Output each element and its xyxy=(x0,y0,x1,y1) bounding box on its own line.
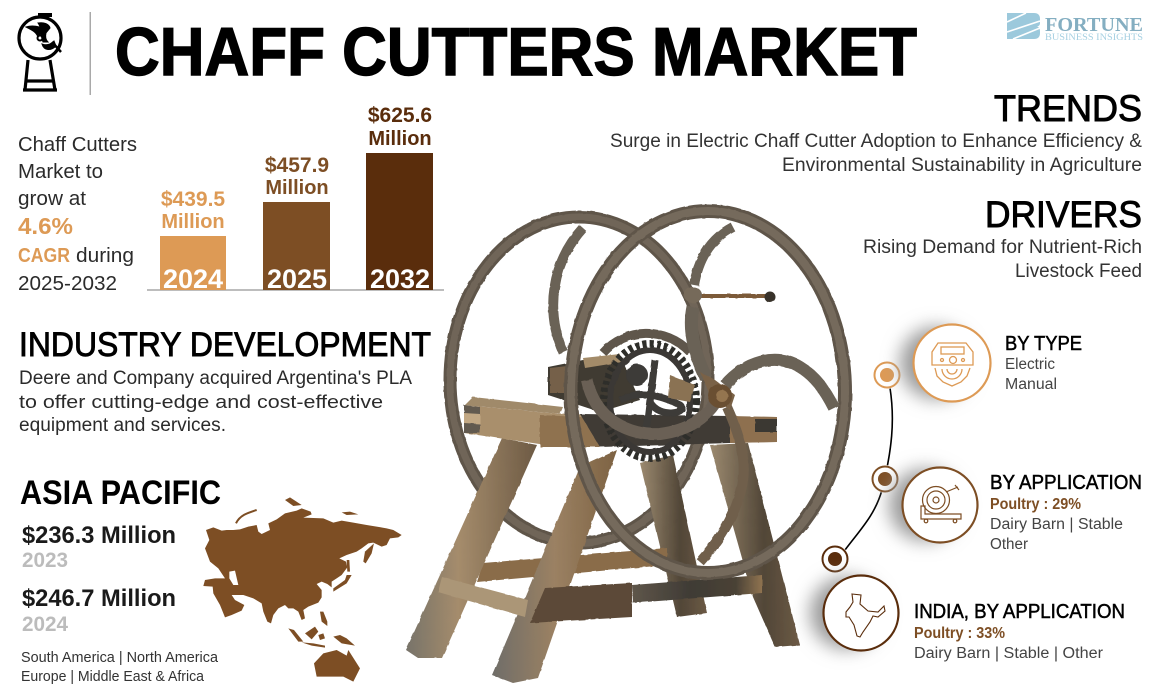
text block: industry development xyxy=(19,368,412,436)
text block: CAGR statement: Market to xyxy=(18,161,103,183)
text block: drivers xyxy=(863,237,1142,282)
icon: by type xyxy=(900,324,990,402)
connector line xyxy=(845,388,892,550)
text block: CAGR statement xyxy=(18,134,137,295)
heading: drivers: DRIVERS xyxy=(985,194,1142,235)
back wheel xyxy=(450,217,733,543)
text block: other regions: South America | North America xyxy=(21,650,219,666)
text block: industry development: to offer cutting-edge and cost-effective xyxy=(19,391,383,412)
hub and handle xyxy=(684,287,776,410)
stat: 2024 value: 2024 xyxy=(22,613,68,636)
icon: by application xyxy=(889,468,978,542)
heading: by application: BY APPLICATION xyxy=(990,472,1142,494)
text block: CAGR statement: CAGR xyxy=(18,245,70,267)
bar: 2024 xyxy=(160,188,226,294)
dot: india xyxy=(821,545,849,573)
heading: trends: TRENDS xyxy=(994,88,1142,129)
text block: India application list: Dairy Barn | Stable | Other xyxy=(914,645,1103,662)
text block: other regions xyxy=(21,650,219,685)
bar: 2024: $439.5 xyxy=(161,188,225,211)
text block: application list: Other xyxy=(990,536,1028,553)
heading: India by application: INDIA, BY APPLICATION xyxy=(914,601,1125,623)
text block: application list xyxy=(990,496,1123,553)
text block: drivers: Livestock Feed xyxy=(1015,261,1142,282)
text block: CAGR statement: 2025-2032 xyxy=(18,273,117,295)
logo: Fortune Business Insights xyxy=(1007,13,1143,43)
text block: India application list xyxy=(914,625,1103,662)
text block: application list: Poultry : 29% xyxy=(990,496,1081,513)
heading: industry development: INDUSTRY DEVELOPMENT xyxy=(19,326,431,364)
text block: type list: Manual xyxy=(1005,376,1057,393)
text block: CAGR statement: during xyxy=(76,245,134,267)
text block: trends: Surge in Electric Chaff Cutter Adoption to Enhance Efficiency & xyxy=(610,131,1142,152)
stat: 2023 value: 2023 xyxy=(22,549,68,572)
header icon: chaff cutter xyxy=(19,13,61,90)
stat: 2024 value xyxy=(22,585,176,636)
bar: 2032: Million xyxy=(368,128,432,150)
bar: 2032: $625.6 xyxy=(368,104,432,127)
bar: 2032: 2032 xyxy=(370,264,430,294)
illustration: chaff cutter machine xyxy=(406,211,845,683)
text block: trends: Environmental Sustainability in Agriculture xyxy=(782,155,1142,176)
heading: Asia Pacific: ASIA PACIFIC xyxy=(20,474,221,512)
dot: by application xyxy=(871,465,899,493)
text block: application list: Dairy Barn | Stable xyxy=(990,516,1123,533)
text block: industry development: Deere and Company acquired Argentina's PLA xyxy=(19,368,412,389)
bar: 2032 xyxy=(366,104,433,294)
title: CHAFF CUTTERS MARKET xyxy=(115,14,917,90)
bar chart: market size xyxy=(147,104,444,294)
text block: CAGR statement: 4.6% xyxy=(18,213,73,239)
legs xyxy=(406,438,800,683)
bar: 2025: $457.9 xyxy=(265,154,329,177)
bar: 2024: 2024 xyxy=(163,264,223,294)
stat: 2023 value xyxy=(22,522,176,572)
text block: drivers: Rising Demand for Nutrient-Rich xyxy=(863,237,1142,258)
heading: by type: BY TYPE xyxy=(1005,333,1082,355)
text block: type list xyxy=(1005,356,1057,393)
map: Asia Pacific xyxy=(203,497,402,682)
text block: India application list: Poultry : 33% xyxy=(914,625,1005,642)
logo: Fortune Business Insights: BUSINESS INSIGHTS xyxy=(1045,33,1143,43)
logo: Fortune Business Insights: FORTUNE xyxy=(1045,14,1143,36)
bar: 2025 xyxy=(263,154,330,294)
text block: type list: Electric xyxy=(1005,356,1055,373)
bar: 2024: Million xyxy=(161,211,225,233)
text block: CAGR statement: grow at xyxy=(18,188,86,210)
cutter box and gear xyxy=(548,345,695,457)
bar: 2025: Million xyxy=(265,177,329,199)
header divider xyxy=(90,12,91,95)
stat: 2023 value: $236.3 Million xyxy=(22,522,176,549)
dot: by type xyxy=(873,361,901,389)
icon: India map xyxy=(810,576,898,650)
text block: CAGR statement: Chaff Cutters xyxy=(18,134,137,156)
text block: trends xyxy=(610,131,1142,176)
text block: other regions: Europe | Middle East & Africa xyxy=(21,669,205,685)
front wheel xyxy=(571,211,845,573)
bar: 2025: 2025 xyxy=(267,264,327,294)
table top xyxy=(464,397,777,447)
stat: 2024 value: $246.7 Million xyxy=(22,585,176,612)
text block: industry development: equipment and services. xyxy=(19,415,226,436)
